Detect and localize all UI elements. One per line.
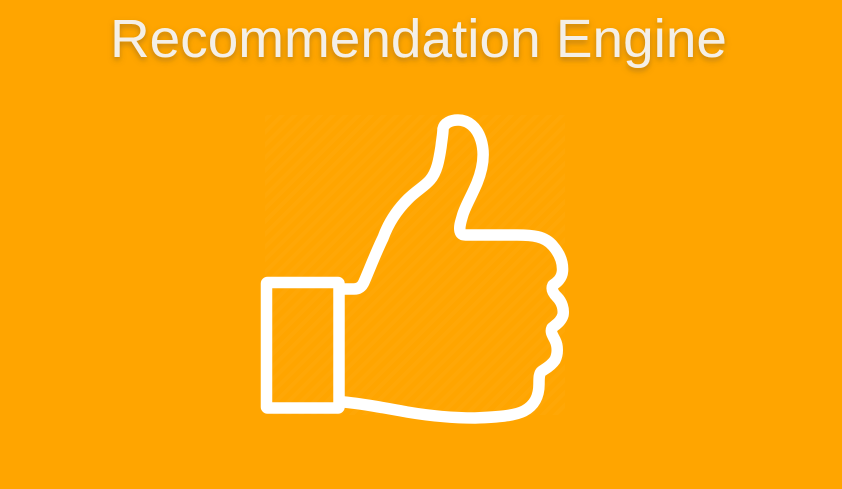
icon: cuff	[266, 282, 339, 408]
icon: hand outline	[344, 120, 563, 418]
icon: thumbs up	[265, 115, 565, 418]
title: Recommendation Engine	[110, 9, 727, 69]
